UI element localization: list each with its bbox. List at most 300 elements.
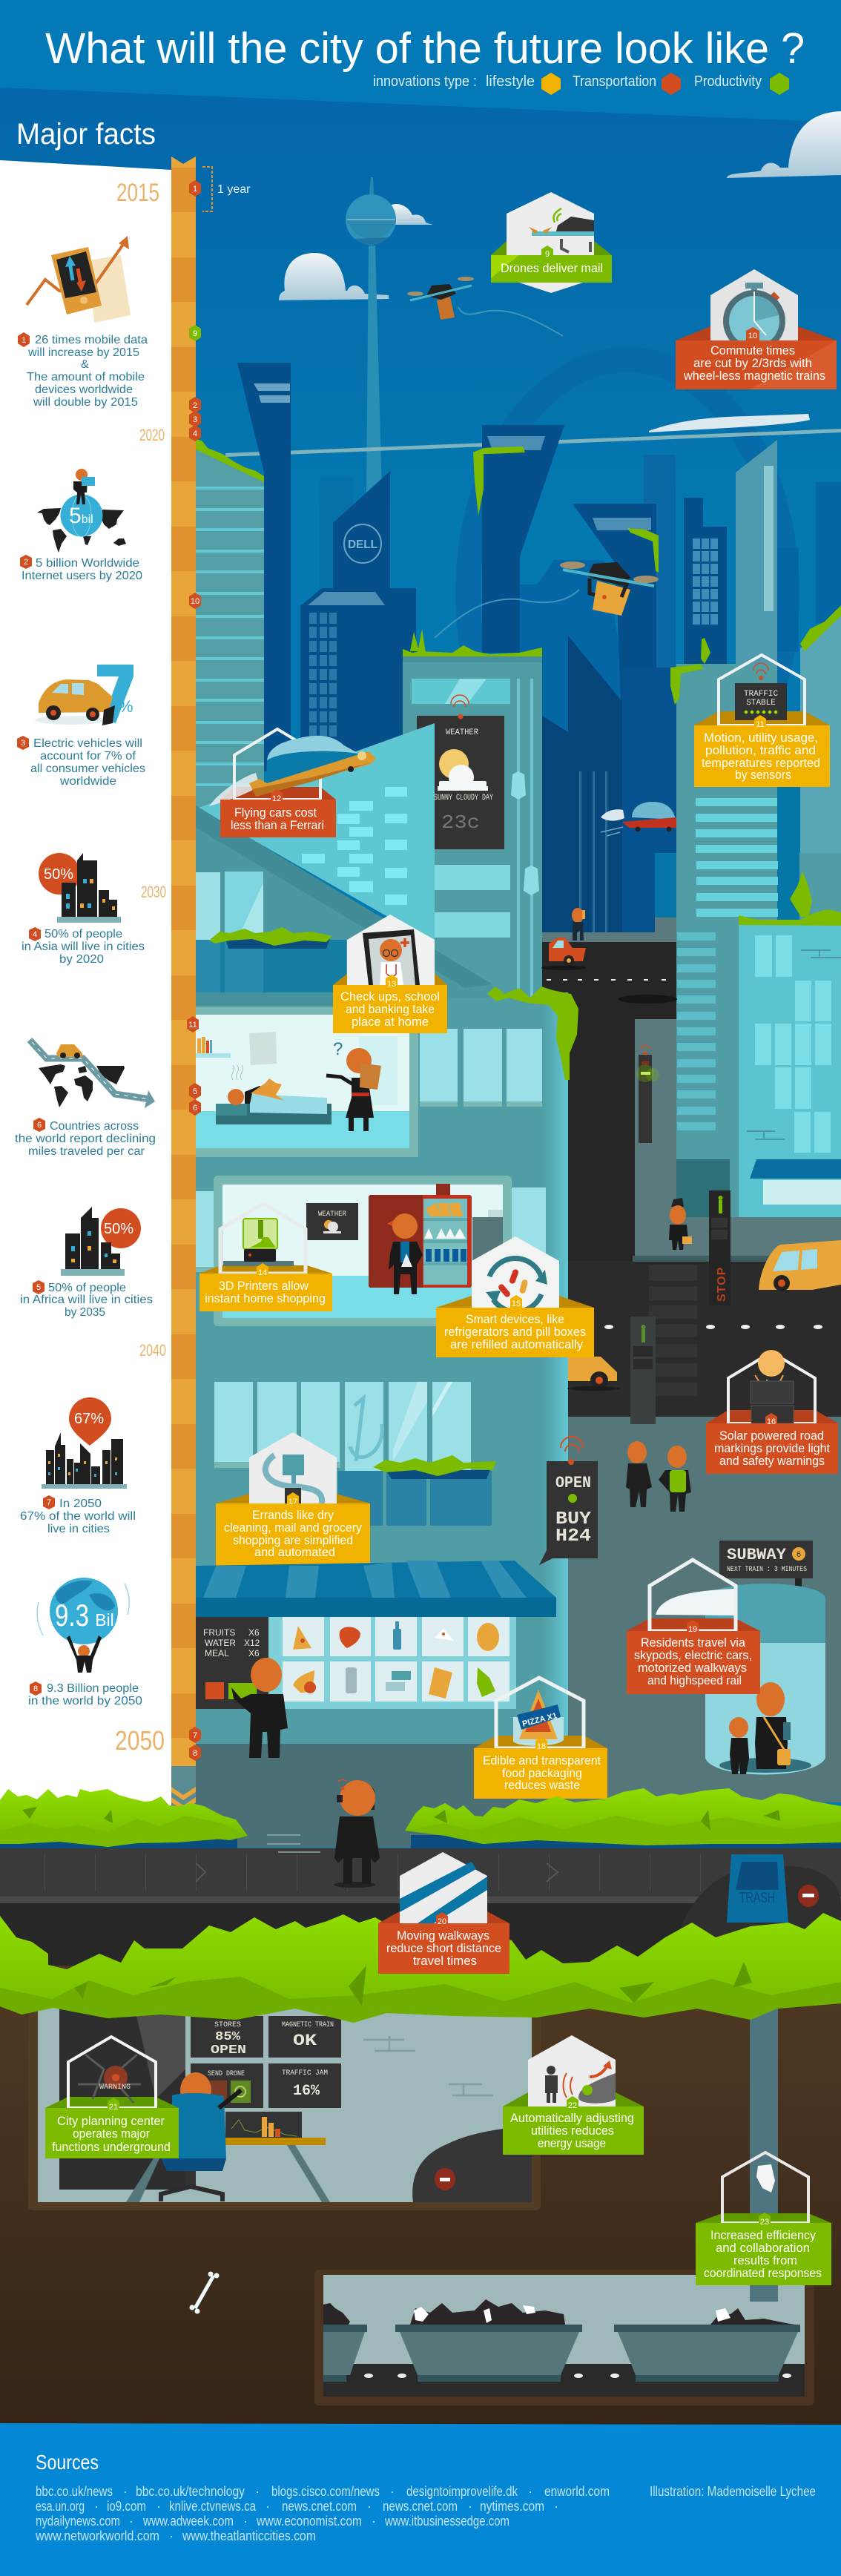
icon: Asia skyline with 50 percent: 50% [44, 866, 73, 883]
pipe into room [750, 2270, 778, 2302]
sources list: · [372, 2514, 376, 2529]
callout 20: moving walkways: reduce short distance [386, 1942, 501, 1955]
sources list: bbc.co.uk/technology [136, 2484, 245, 2499]
bedroom scene [196, 1015, 418, 1157]
cart right [614, 2325, 800, 2382]
fact 1: mobile data: & [81, 358, 89, 371]
dark utility tube [412, 2126, 532, 2202]
callout 10: commute times [676, 269, 837, 389]
icon: bullet train [656, 1589, 734, 1615]
open sign: H24 [555, 1526, 591, 1546]
fact 7: world in cities: In 2050 [59, 1498, 102, 1510]
bedroom sills [420, 1101, 546, 1107]
callout 20: moving walkways [378, 1852, 509, 1974]
sources list: · [528, 2484, 532, 2499]
callout 12: flying cars: less than a Ferrari [231, 819, 324, 832]
cloud: left [279, 253, 389, 300]
earth underground [0, 1966, 841, 2425]
icon: falling waste [756, 2164, 775, 2193]
icon: flying car [209, 736, 376, 806]
timeline bar [171, 157, 196, 1811]
sources list: www.theatlanticcities.com [182, 2529, 316, 2543]
big center tower top [403, 629, 542, 1026]
bedroom windows [420, 1029, 546, 1101]
callout 19: residents travel: 19 [688, 1625, 697, 1634]
family in elevator [729, 1682, 791, 1774]
sources list: esa.un.org [36, 2499, 85, 2514]
header band [0, 0, 841, 122]
open sign [539, 1437, 598, 1565]
callout 11: sensors report: 11 [756, 720, 765, 729]
timeline years: 2015 [116, 179, 159, 207]
hedge right [405, 1788, 841, 1845]
callout 20: moving walkways: travel times [413, 1954, 477, 1968]
icon: warning map: WARNING [99, 2083, 131, 2092]
title: What will the city of the future look like ? [45, 24, 805, 73]
red car and person [549, 908, 586, 966]
weather display: 23c [441, 811, 480, 834]
callout 19: residents travel: motorized walkways [638, 1661, 747, 1675]
status panels: MAGNETIC TRAIN [282, 2021, 334, 2029]
callout 19: residents travel: skypods, electric cars, [634, 1649, 752, 1662]
fact 1: mobile data: will double by 2015 [33, 396, 138, 409]
timeline badges: 5 [193, 1087, 197, 1096]
small flying car [601, 802, 676, 836]
icon: skyline with 67 percent pin [42, 1397, 127, 1489]
callout 9: drones deliver mail [491, 192, 612, 293]
central teal mass [196, 994, 568, 1744]
open sign: BUY [555, 1509, 592, 1529]
grass roof on far right tower [800, 605, 841, 651]
fact 8: world population: in the world by 2050 [28, 1695, 142, 1707]
callout 12: flying cars: Flying cars cost [234, 806, 317, 820]
callout 23: increased efficiency: coordinated responses [704, 2267, 822, 2280]
legend: innovation types: lifestyle [486, 73, 535, 90]
sources list: · [367, 2499, 372, 2514]
weather screen: WEATHER [318, 1210, 346, 1219]
planter upper [209, 927, 332, 949]
icon: person holding globe [37, 1578, 129, 1673]
dark planter base [0, 1835, 841, 1850]
timeline bracket [202, 167, 251, 211]
fact 5: Africa cities: in Africa will live in cities [20, 1294, 153, 1306]
icon: sun and solar panel [751, 1350, 794, 1423]
icon: electric car and seven percent: % [119, 697, 133, 716]
shop front: X6 [248, 1648, 260, 1658]
man with hat [669, 1198, 692, 1250]
fact 3: electric vehicles: all consumer vehicles [30, 762, 145, 775]
customer at shop [231, 1658, 288, 1758]
printer room scene [196, 1176, 546, 1326]
callout 18: edible packaging: 18 [537, 1742, 546, 1751]
pedestrian signal: STOP [716, 1267, 728, 1302]
callout 13: check ups at home: and banking take [346, 1003, 435, 1016]
shop awning [196, 1561, 556, 1617]
moving walkway [0, 1848, 841, 1966]
fact 1: mobile data [18, 236, 148, 409]
lit wall edge beside road [542, 992, 568, 1744]
floor lights [364, 2374, 791, 2378]
fact 6: declining miles [15, 1040, 156, 1158]
delivery drone large [435, 561, 659, 638]
street traffic light [636, 1046, 659, 1143]
fact 3: electric vehicles: account for 7% of [40, 750, 136, 762]
crosswalk [649, 1265, 697, 1396]
status panels: TRAFFIC JAM [282, 2069, 328, 2078]
callout 16: solar powered road markings: Solar powered road [719, 1429, 824, 1443]
right teal building with windows [739, 853, 841, 1217]
sources list: · [156, 2499, 161, 2514]
heading: major facts: Major facts [16, 118, 156, 151]
shop front: X6 [248, 1627, 260, 1638]
fact 8: world population [28, 1578, 142, 1707]
fact 7: world in cities: 7 [47, 1498, 51, 1507]
icon: pizza box [513, 1690, 564, 1746]
callout 9: drones deliver mail: 9 [545, 250, 550, 259]
underground control room [28, 1995, 541, 2210]
callout 11: sensors report: temperatures reported [702, 757, 820, 770]
timeline badges: 8 [193, 1749, 197, 1758]
callout 15: smart devices: 15 [512, 1299, 521, 1308]
callout 17: errands: cleaning, mail and grocery [224, 1521, 363, 1535]
fact 7: world in cities [20, 1397, 136, 1535]
icon: drone in mail house [529, 208, 594, 252]
callout 21: city planning center: City planning center [57, 2115, 165, 2128]
callout 10: commute times: 10 [748, 332, 757, 340]
callout 22: adjusting utilities: energy usage [538, 2137, 606, 2150]
callout 10: commute times: Commute times [710, 344, 795, 358]
callout 21: city planning center: functions underground [52, 2141, 171, 2154]
icon: Asia skyline with 50 percent [39, 853, 121, 923]
callout 14: 3D printers: 3D Printers allow [219, 1279, 309, 1293]
sources list: · [255, 2484, 260, 2499]
timeline years: 2030 [141, 883, 166, 901]
back buildings [225, 363, 841, 774]
legend: innovation types [373, 73, 789, 95]
icon: pill refill arrows [486, 1258, 547, 1311]
icon: tablet doctor [363, 929, 420, 985]
timeline years: 2050 [115, 1725, 165, 1756]
callout 17: errands: and automated [254, 1546, 335, 1559]
status panels: 16% [293, 2083, 320, 2100]
sources list: blogs.cisco.com/news [271, 2484, 380, 2499]
icon: globe with person [37, 469, 126, 553]
callout 18: edible packaging: food packaging [502, 1767, 582, 1780]
open sign: OPEN [555, 1474, 591, 1492]
icon: pizza box: PIZZA X1 [521, 1711, 558, 1729]
lower conveyor room [314, 2270, 814, 2405]
fact 1: mobile data: 26 times mobile data [35, 334, 148, 346]
status panels: 85% [215, 2030, 241, 2044]
fact 4: Asia cities [22, 853, 145, 966]
cart left [323, 2325, 367, 2382]
callout 19: residents travel [627, 1560, 760, 1694]
icon: traffic screen [735, 663, 787, 720]
pedestrian signal [709, 1190, 730, 1305]
callout 21: city planning center: operates major [73, 2127, 150, 2141]
sloped light building [196, 723, 492, 998]
two pedestrians [626, 1441, 691, 1512]
big green moss drip [487, 986, 578, 1080]
sources list: · [390, 2484, 395, 2499]
weather display: SUNNY CLOUDY DAY [434, 794, 493, 803]
fact 4: Asia cities: in Asia will live in cities [22, 941, 145, 953]
callout 17: errands [216, 1432, 370, 1566]
callout 22: adjusting utilities: utilities reduces [531, 2124, 614, 2138]
legend: innovation types: innovations type : [373, 73, 477, 90]
icon: stopwatch [723, 283, 785, 352]
fact 5: Africa cities: by 2035 [65, 1306, 105, 1319]
fact 4: Asia cities: by 2020 [59, 953, 104, 966]
fact 8: world population: 8 [33, 1684, 38, 1693]
sources list: · [243, 2514, 248, 2529]
icon: warning map [78, 2055, 141, 2103]
sources list: · [94, 2499, 99, 2514]
sources list: io9.com [107, 2499, 146, 2514]
callout 15: smart devices: Smart devices, like [466, 1313, 564, 1326]
weather display [417, 695, 504, 849]
commuter on walkway [267, 1779, 380, 1884]
mezzanine windows [196, 872, 346, 1015]
right building with stripes [670, 638, 800, 1235]
callout 22: adjusting utilities: Automatically adjusting [510, 2112, 634, 2125]
icon: 3D printer [223, 1219, 294, 1266]
fact 2: internet users [20, 469, 142, 582]
callout 23: increased efficiency [696, 2152, 831, 2285]
callout 10: commute times: wheel-less magnetic trains [683, 369, 825, 383]
timeline years: 2020 [139, 426, 165, 444]
icon: traffic screen: TRAFFIC [744, 690, 778, 699]
timeline badges: 3 [193, 415, 197, 424]
road lights [604, 1325, 822, 1329]
sources list: · [468, 2499, 472, 2514]
legend: innovation types: Transportation [573, 73, 656, 90]
fact 6: declining miles: Countries across [50, 1120, 139, 1133]
callout 12: flying cars: 12 [272, 794, 281, 803]
timeline badges: 6 [193, 1104, 197, 1113]
status panels: STORES [214, 2021, 241, 2029]
callout 23: increased efficiency: Increased efficiency [710, 2229, 817, 2242]
callout 21: city planning center [45, 2037, 179, 2158]
major facts white panel [0, 160, 171, 1810]
callout 14: 3D printers: instant home shopping [205, 1292, 326, 1305]
callout 14: 3D printers: 14 [258, 1268, 267, 1277]
cloud: top right [727, 111, 841, 178]
sources heading: Sources [36, 2451, 99, 2474]
subway sign: 6 [797, 1550, 801, 1559]
sources list: · [554, 2499, 558, 2514]
sources list: bbc.co.uk/news [36, 2484, 113, 2499]
fact 6: declining miles: the world report declining [15, 1133, 156, 1145]
callout 21: city planning center: 21 [109, 2103, 118, 2112]
callout 16: solar powered road markings [706, 1350, 838, 1474]
lower sidewalk [568, 1417, 841, 1802]
callout 23: increased efficiency: and collaboration [716, 2241, 810, 2255]
glass subway elevator [705, 1584, 825, 1774]
refrigerator [369, 1184, 472, 1294]
fact 5: Africa cities: 50% of people [48, 1282, 126, 1294]
icon: Africa skyline with 50 percent: 50% [104, 1221, 133, 1237]
dark lower street facade [542, 636, 676, 935]
callout 18: edible packaging: Edible and transparent [483, 1754, 601, 1768]
sources list: nytimes.com [480, 2499, 544, 2514]
sources list: nydailynews.com [36, 2514, 120, 2529]
timeline years: 2040 [139, 1341, 166, 1360]
icon: road over world map [30, 1040, 155, 1108]
callout 15: smart devices [436, 1236, 594, 1357]
callout 23: increased efficiency: 23 [760, 2218, 769, 2227]
icon: robotic arm delivery [266, 1455, 322, 1503]
callout 12: flying cars [209, 729, 376, 837]
subway sign [719, 1541, 813, 1592]
fact 3: electric vehicles: 3 [21, 739, 25, 748]
fact 4: Asia cities: 4 [33, 930, 37, 939]
status panels: SEND DRONE [208, 2070, 245, 2078]
icon: skyline with 67 percent pin: 67% [74, 1411, 104, 1427]
timeline badges: 11 [188, 1021, 197, 1030]
callout 10: commute times: are cut by 2/3rds with [693, 357, 812, 370]
shop front [196, 1617, 516, 1709]
callout 16: solar powered road markings: 16 [767, 1417, 776, 1426]
callout 11: sensors report: pollution, traffic and [705, 744, 816, 757]
second pedestrian signal [630, 1317, 656, 1424]
illustration credit: Illustration: Mademoiselle Lychee [650, 2484, 816, 2499]
shop front: X12 [244, 1638, 260, 1648]
shop front: FRUITS [203, 1627, 235, 1638]
fact 2: internet users: Internet users by 2020 [22, 570, 142, 582]
desk [126, 2138, 330, 2202]
trash tube and bin: TRASH [739, 1890, 775, 1906]
callout 20: moving walkways: Moving walkways [397, 1929, 489, 1943]
fact 7: world in cities: live in cities [47, 1523, 110, 1535]
status panels: OK [293, 2032, 317, 2050]
callout 13: check ups at home [333, 915, 447, 1033]
dell logo: DELL [348, 538, 377, 551]
status panels [191, 2016, 341, 2138]
cloud: behind tower [392, 204, 433, 225]
callout 19: residents travel: Residents travel via [641, 1636, 746, 1650]
icon: phones and growth arrow [27, 236, 131, 323]
planter lower [373, 1455, 496, 1479]
green drips on towers [473, 447, 659, 573]
icon: traffic screen: STABLE [746, 699, 776, 708]
sources list: · [129, 2514, 133, 2529]
timeline years [115, 179, 166, 1756]
bone [190, 2271, 220, 2314]
fact 1: mobile data: devices worldwide [35, 383, 133, 396]
no entry sign [435, 2168, 455, 2190]
drone with parcel small [407, 277, 563, 336]
sources list [35, 2484, 610, 2543]
food icons [293, 1621, 499, 1699]
callout 13: check ups at home: 13 [387, 980, 396, 989]
road [541, 918, 841, 1417]
fact 7: world in cities: 67% of the world will [20, 1510, 136, 1523]
hedge left [0, 1789, 248, 1847]
operator in chair [161, 2072, 241, 2201]
pipe inner [750, 2210, 778, 2302]
callout 15: smart devices: are refilled automatically [450, 1338, 584, 1351]
cart piles [323, 2299, 795, 2325]
sources list: knlive.ctvnews.ca [169, 2499, 257, 2514]
callout 16: solar powered road markings: markings provide light [714, 1442, 830, 1455]
water pipe [750, 2008, 778, 2302]
fact 6: declining miles: miles traveled per car [28, 1145, 145, 1158]
timeline badges: 9 [193, 329, 197, 338]
icon: walkway stripes with arrows [400, 1862, 487, 1923]
shop front: WATER [205, 1638, 236, 1648]
far right tower [800, 613, 841, 927]
fact 2: internet users: 5 billion Worldwide [36, 557, 139, 570]
status panels: OPEN [211, 2043, 246, 2058]
fact 3: electric vehicles: worldwide [59, 775, 116, 788]
callout 17: errands: 17 [288, 1498, 297, 1506]
callout 23: increased efficiency: results from [733, 2254, 797, 2267]
upper shop windows [214, 1382, 492, 1526]
callout 14: 3D printers [199, 1204, 332, 1311]
sources list: enworld.com [544, 2484, 610, 2499]
sources list: www.itbusinessedge.com [384, 2514, 509, 2529]
high speed train [649, 414, 810, 432]
timeline badges: 7 [193, 1731, 197, 1740]
callout 22: adjusting utilities: 22 [568, 2101, 577, 2110]
callout 15: smart devices: refrigerators and pill boxes [444, 1325, 586, 1339]
dell logo [344, 524, 381, 563]
sources list: designtoimprovelife.dk [406, 2484, 518, 2499]
weather screen [306, 1203, 358, 1240]
timeline bracket: 1 year [217, 183, 251, 196]
fact 1: mobile data: The amount of mobile [27, 371, 145, 383]
fact 6: declining miles: 6 [37, 1121, 42, 1130]
monorail line [225, 429, 841, 457]
footer band [0, 2423, 841, 2576]
icon: person holding globe: 9.3 [55, 1598, 89, 1633]
woman with parcel: ? [333, 1039, 343, 1059]
weather display: WEATHER [446, 728, 478, 737]
trash tube and bin [667, 1854, 841, 1966]
fact 1: mobile data: 1 [22, 336, 26, 345]
icon: Africa skyline with 50 percent [61, 1207, 141, 1276]
callout 13: check ups at home: place at home [352, 1015, 429, 1029]
windows right [693, 538, 718, 625]
sources list: · [266, 2499, 270, 2514]
cart center [395, 2325, 582, 2382]
TV tower [346, 177, 396, 493]
callout 18: edible packaging [474, 1678, 607, 1799]
callout 17: errands: Errands like dry [252, 1509, 334, 1522]
fact 5: Africa cities: 5 [36, 1283, 41, 1292]
timeline badges: 4 [193, 429, 197, 438]
big grass layer [0, 1913, 841, 2023]
windows left [309, 613, 337, 737]
icon: person and sensor [545, 2061, 616, 2104]
callout 19: residents travel: and highspeed rail [647, 1674, 742, 1687]
timeline badges: 1 [193, 185, 197, 194]
callout 22: adjusting utilities [503, 2035, 644, 2155]
callout 16: solar powered road markings: and safety warnings [719, 1455, 825, 1468]
yellow car right [759, 1240, 841, 1291]
sidewalk block [633, 1019, 841, 1262]
wall cracks [363, 2036, 493, 2095]
woman with parcel [326, 1039, 381, 1131]
fact 3: electric vehicles: Electric vehicles will [33, 737, 142, 750]
back arch [468, 360, 787, 827]
sources list: · [123, 2484, 128, 2499]
legend: innovation types: Productivity [694, 73, 762, 90]
callout 17: errands: shopping are simplified [233, 1534, 353, 1547]
subway sign: NEXT TRAIN : 3 MINUTES [727, 1566, 807, 1574]
sources list: www.economist.com [256, 2514, 362, 2529]
